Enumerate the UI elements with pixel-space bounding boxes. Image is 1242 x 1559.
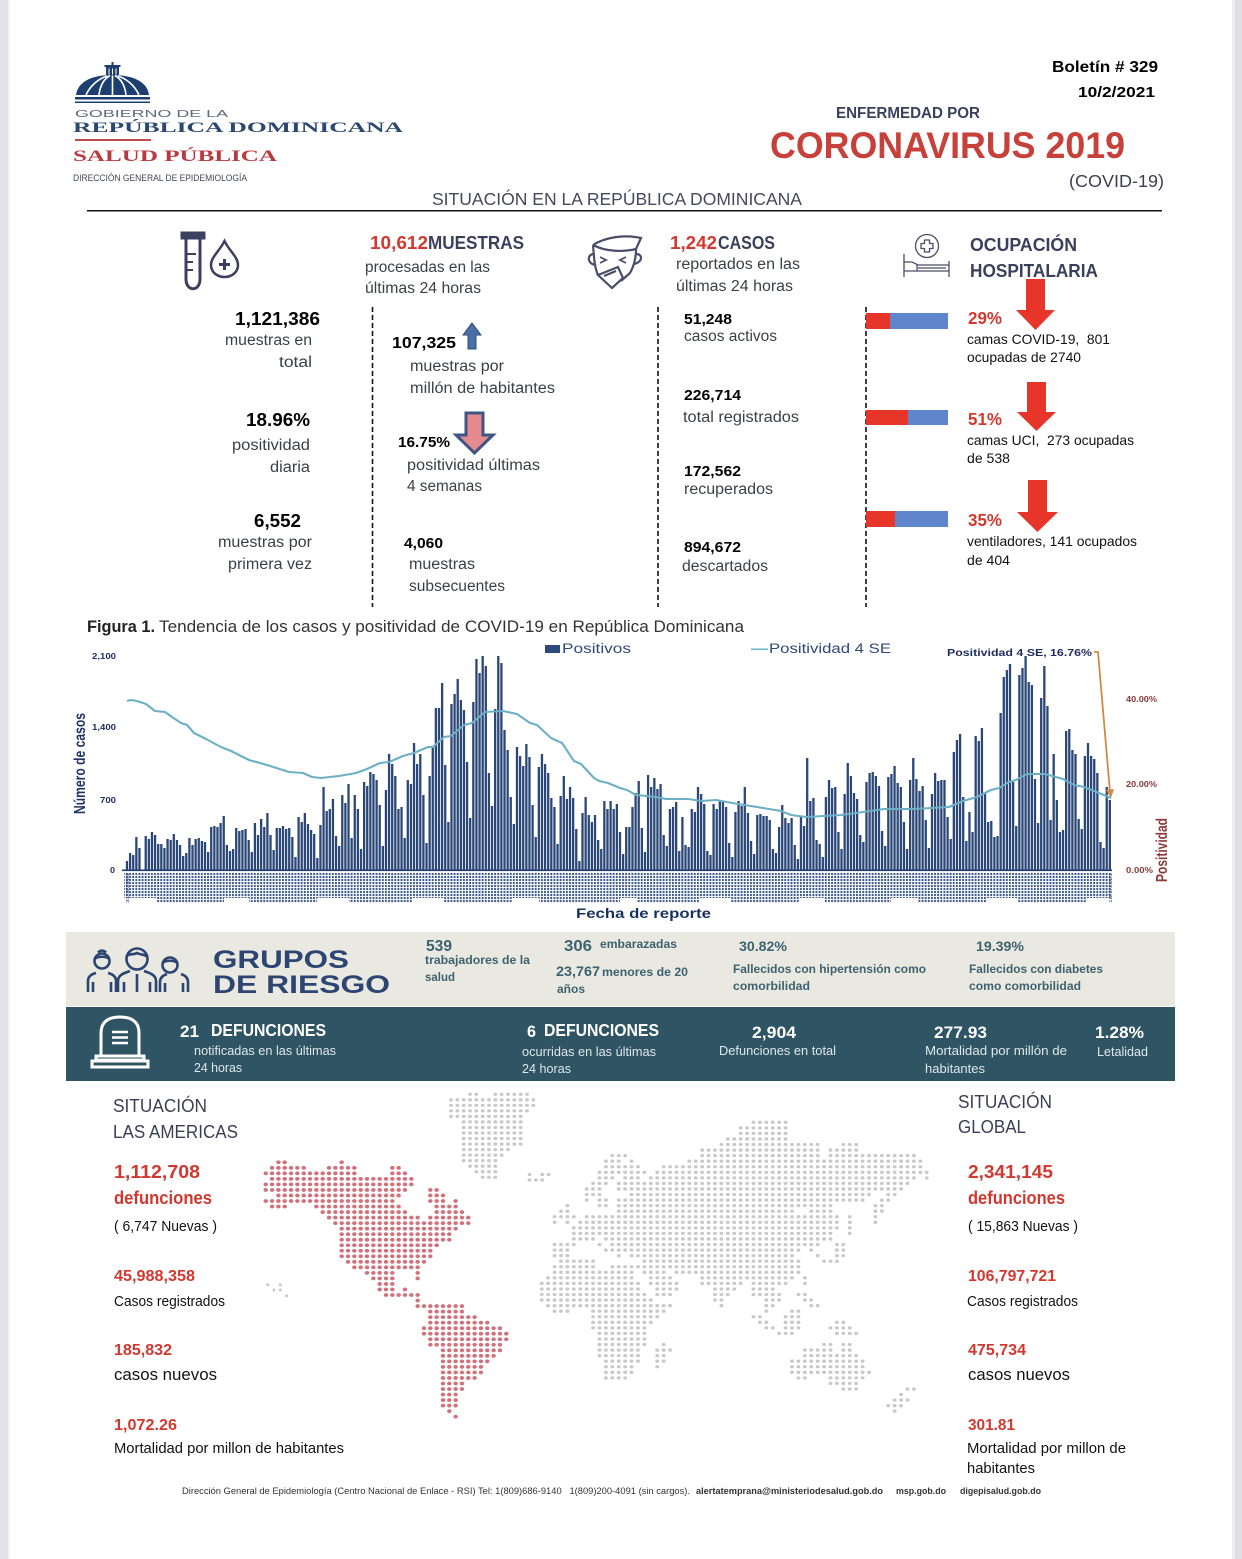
footer contact line: digepisalud.gob.do bbox=[960, 1486, 1041, 1496]
stat: positividad últimas 4 semanas: positividad últimas bbox=[407, 457, 540, 474]
stat: defunciones bbox=[114, 1161, 217, 1235]
heading: 1,242 casos: CASOS bbox=[718, 232, 775, 253]
stat: descartados: 894,672 bbox=[684, 540, 741, 556]
heading: 10,612 muestras: 10,612 bbox=[370, 232, 428, 253]
heading: 10,612 muestras bbox=[365, 232, 524, 297]
stat: casos nuevos bbox=[968, 1342, 1070, 1384]
stat: embarazadas: 306 bbox=[564, 938, 592, 955]
stat: mortalidad por millón bbox=[925, 1024, 1067, 1076]
bulletin number and date bbox=[1052, 59, 1158, 101]
bars: positivos por día bbox=[127, 656, 1110, 870]
figure caption: Figura 1. bbox=[87, 618, 155, 636]
stat: diabetes bbox=[969, 938, 1103, 993]
stat: casos nuevos: 185,832 bbox=[114, 1342, 172, 1359]
figure caption: Tendencia de los casos y positividad de COVID-19 en República Dominicana bbox=[159, 618, 745, 636]
footer contact line: alertatemprana@ministeriodesalud.gob.do bbox=[696, 1486, 884, 1496]
stat: mortalidad bbox=[967, 1417, 1126, 1477]
stat: muestras por millón: millón de habitantes bbox=[410, 380, 555, 397]
y axis left labels bbox=[92, 652, 117, 875]
stat: muestras subsecuentes: subsecuentes bbox=[409, 578, 505, 595]
arrow: up bbox=[463, 323, 481, 349]
heading: ocupación hospitalaria bbox=[970, 234, 1098, 281]
map: Groenlandia e Islandia bbox=[451, 1094, 549, 1180]
stat: embarazadas: embarazadas bbox=[600, 937, 677, 951]
map: Eurasia, África y Oceanía bbox=[542, 1122, 927, 1411]
panel: situación las Américas bbox=[113, 1095, 344, 1457]
stat: defunciones: 2,341,145 bbox=[968, 1161, 1053, 1182]
stat: positividad diaria: diaria bbox=[270, 459, 310, 476]
stat: muestras por primera vez: muestras por bbox=[218, 534, 312, 551]
stat: mortalidad: habitantes bbox=[967, 1461, 1035, 1477]
stat: positividad últimas 4 semanas: 16.75% bbox=[398, 435, 450, 451]
stat: casos registrados bbox=[114, 1268, 225, 1310]
stat: defunciones: 1,112,708 bbox=[114, 1161, 200, 1182]
panel: ocupación hospitalaria bbox=[866, 234, 1137, 568]
stat: muestras subsecuentes: muestras bbox=[409, 556, 475, 573]
world dot map bbox=[266, 1094, 927, 1417]
stat: defunciones: defunciones bbox=[968, 1188, 1065, 1208]
stat: positividad últimas 4 semanas bbox=[398, 435, 540, 495]
heading: situación las Américas: LAS AMERICAS bbox=[113, 1122, 238, 1142]
x axis date ticks: 10/2/2021 bbox=[1108, 872, 1113, 903]
y axis right labels: 40.00% bbox=[1126, 695, 1157, 704]
heading: situación global bbox=[958, 1091, 1052, 1137]
stat: muestras subsecuentes: 4,060 bbox=[404, 536, 443, 552]
stat: muestras por millón: muestras por bbox=[410, 358, 504, 375]
x axis title: Fecha de reporte bbox=[576, 906, 712, 921]
stat: diabetes: Fallecidos con diabetes bbox=[969, 962, 1103, 976]
logo: Gobierno de la República Dominicana, Salud Pública: SALUD PÚBLICA bbox=[73, 146, 278, 165]
icon: capitol dome bbox=[75, 62, 150, 103]
stat: casos nuevos bbox=[114, 1342, 217, 1384]
stat: casos registrados: Casos registrados bbox=[967, 1294, 1078, 1310]
stat: ventiladores: 35% bbox=[968, 510, 1002, 530]
heading: 10,612 muestras: MUESTRAS bbox=[428, 232, 524, 253]
heading: ocupación hospitalaria: HOSPITALARIA bbox=[970, 260, 1098, 281]
stat: camas COVID-19 bbox=[967, 308, 1110, 365]
stat: 21 defunciones notificadas bbox=[180, 1020, 336, 1075]
bar: camas COVID 29% bbox=[866, 313, 948, 329]
stat: mortalidad por millón: Mortalidad por millón de bbox=[925, 1044, 1067, 1058]
stat: defunciones: ( 6,747 Nuevas ) bbox=[114, 1219, 217, 1235]
y axis left title: Número de casos bbox=[72, 713, 89, 814]
stat: recuperados: recuperados bbox=[684, 481, 773, 498]
stat: recuperados: 172,562 bbox=[684, 464, 741, 480]
stat: mortalidad: 301.81 bbox=[968, 1417, 1015, 1434]
stat: muestras por primera vez bbox=[218, 510, 312, 573]
stat: defunciones en total: 2,904 bbox=[752, 1024, 797, 1042]
y axis left labels: 700 bbox=[100, 796, 117, 805]
stat: defunciones: ( 15,863 Nuevas ) bbox=[968, 1219, 1078, 1235]
legend bbox=[545, 641, 891, 656]
map: las Américas bbox=[266, 1162, 506, 1417]
heading: 10,612 muestras: últimas 24 horas bbox=[365, 280, 481, 297]
stat: casos nuevos: casos nuevos bbox=[114, 1366, 217, 1384]
stat: descartados: descartados bbox=[682, 558, 768, 575]
stat: muestras en total: total bbox=[279, 354, 312, 371]
stat: embarazadas bbox=[564, 937, 677, 955]
stat: muestras por millón: 107,325 bbox=[392, 335, 456, 352]
stat: defunciones en total: Defunciones en total bbox=[719, 1044, 836, 1058]
logo: Gobierno de la República Dominicana, Salud Pública bbox=[73, 62, 404, 184]
panel: muestras bbox=[182, 232, 555, 595]
stat: 6 defunciones ocurridas: ocurridas en las últimas bbox=[522, 1045, 656, 1059]
stat: mortalidad: Mortalidad por millon de habitantes bbox=[114, 1441, 344, 1457]
heading: grupos de riesgo: DE RIESGO bbox=[213, 971, 390, 999]
stat: camas UCI bbox=[967, 409, 1134, 466]
stat: ventiladores: ventiladores, 141 ocupados bbox=[967, 533, 1137, 549]
stat: camas UCI: 51% bbox=[968, 409, 1002, 429]
arrow: down bbox=[456, 413, 493, 453]
heading: 1,242 casos: 1,242 bbox=[670, 232, 717, 253]
x axis line bbox=[122, 870, 1112, 871]
stat: letalidad: Letalidad bbox=[1097, 1045, 1148, 1059]
stat: mortalidad por millón: 277.93 bbox=[934, 1024, 987, 1042]
stat: 6 defunciones ocurridas: DEFUNCIONES bbox=[544, 1020, 659, 1040]
stat: 21 defunciones notificadas: notificadas en las últimas bbox=[194, 1044, 336, 1058]
stat: mortalidad: 1,072.26 bbox=[114, 1417, 177, 1434]
stat: defunciones bbox=[968, 1161, 1078, 1235]
x axis date ticks bbox=[124, 872, 1113, 903]
stat: ventiladores: de 404 bbox=[967, 552, 1010, 568]
stat: muestras subsecuentes bbox=[404, 536, 505, 595]
heading: 1,242 casos: últimas 24 horas bbox=[676, 278, 793, 295]
icon: hospital bed bbox=[904, 234, 949, 277]
chart: casos positivos y positividad bbox=[72, 641, 1171, 921]
stat: casos registrados: 106,797,721 bbox=[968, 1268, 1056, 1285]
stat: hipertensión: 30.82% bbox=[739, 938, 788, 954]
stat: menores de 20 años: 23,767 bbox=[556, 963, 600, 979]
stat: casos nuevos: casos nuevos bbox=[968, 1366, 1070, 1384]
stat: positividad diaria: 18.96% bbox=[246, 409, 310, 430]
y axis right title: Positividad bbox=[1154, 818, 1171, 882]
stat: hipertensión bbox=[733, 938, 926, 993]
title: Enfermedad por Coronavirus 2019: (COVID-19) bbox=[1069, 171, 1164, 191]
callout: positividad 4 SE, 16.76%: Positividad 4 SE, 16.76% bbox=[947, 648, 1092, 659]
stat: mortalidad por millón: habitantes bbox=[925, 1062, 985, 1076]
stat: positividad diaria bbox=[232, 409, 310, 476]
callout: positividad 4 SE, 16.76% bbox=[947, 648, 1114, 798]
icon: test tube and drop bbox=[182, 233, 238, 289]
y axis right labels: 20.00% bbox=[1126, 780, 1157, 789]
heading: 1,242 casos: reportados en las bbox=[676, 256, 800, 273]
arrow: ventiladores down bbox=[1017, 480, 1058, 532]
stat: camas COVID-19: 29% bbox=[968, 308, 1002, 328]
panel: defunciones bbox=[66, 1007, 1175, 1081]
panel: grupos de riesgo bbox=[66, 932, 1175, 1006]
stat: menores de 20 años: años bbox=[557, 982, 585, 996]
footer contact line: msp.gob.do bbox=[896, 1486, 946, 1496]
legend: Positivos bbox=[562, 641, 631, 656]
footer contact line: Dirección General de Epidemiología (Centro Nacional de Enlace - RSI) Tel: 1(809)686-9140 1(809)200-4091 (sin cargos). bbox=[182, 1486, 690, 1496]
stat: casos activos: 51,248 bbox=[684, 312, 732, 328]
stat: muestras por millón bbox=[392, 335, 555, 397]
stat: casos activos: casos activos bbox=[684, 328, 777, 345]
line: positividad 4 SE bbox=[127, 700, 1111, 817]
stat: casos registrados: 45,988,358 bbox=[114, 1268, 195, 1285]
stat: camas UCI: camas UCI, 273 ocupadas bbox=[967, 432, 1134, 448]
stat: positividad últimas 4 semanas: 4 semanas bbox=[407, 478, 482, 495]
arrow: camas UCI down bbox=[1017, 382, 1056, 431]
stat: 21 defunciones notificadas: 24 horas bbox=[194, 1061, 242, 1075]
stat: casos nuevos: 475,734 bbox=[968, 1342, 1026, 1359]
stat: defunciones en total bbox=[719, 1024, 836, 1058]
stat: 6 defunciones ocurridas: 24 horas bbox=[522, 1062, 571, 1076]
logo: Gobierno de la República Dominicana, Salud Pública: GOBIERNO DE LA bbox=[75, 109, 229, 120]
stat: total registrados: total registrados bbox=[683, 409, 799, 426]
legend: Positividad 4 SE bbox=[769, 641, 891, 656]
bar: ventiladores 35% bbox=[866, 511, 948, 527]
section heading: situación en la República Dominicana: SITUACIÓN EN LA REPÚBLICA DOMINICANA bbox=[432, 188, 802, 209]
stat: trabajadores de la salud bbox=[425, 938, 530, 984]
stat: casos registrados: Casos registrados bbox=[114, 1294, 225, 1310]
stat: diabetes: 19.39% bbox=[976, 938, 1025, 954]
stat: muestras en total bbox=[225, 308, 320, 371]
heading: grupos de riesgo: GRUPOS bbox=[213, 946, 349, 974]
stat: casos activos bbox=[684, 312, 777, 345]
stat: diabetes: como comorbilidad bbox=[969, 979, 1081, 993]
y axis left labels: 2,100 bbox=[92, 652, 117, 661]
map: Hawái bbox=[268, 1285, 287, 1296]
stat: defunciones: defunciones bbox=[114, 1188, 212, 1208]
footer contact line bbox=[182, 1486, 1041, 1496]
stat: menores de 20 años: menores de 20 bbox=[602, 965, 688, 979]
stat: muestras en total: 1,121,386 bbox=[235, 308, 320, 329]
icon: tombstone bbox=[92, 1017, 148, 1067]
title: Enfermedad por Coronavirus 2019 bbox=[770, 105, 1164, 191]
y axis right labels: 0.00% bbox=[1126, 866, 1153, 875]
stat: mortalidad bbox=[114, 1417, 344, 1457]
y axis right labels bbox=[1126, 695, 1157, 875]
stat: menores de 20 años bbox=[556, 963, 688, 996]
stat: positividad diaria: positividad bbox=[232, 437, 310, 454]
heading: situación las Américas bbox=[113, 1095, 238, 1142]
heading: situación global: GLOBAL bbox=[958, 1117, 1026, 1137]
stat: camas COVID-19: camas COVID-19, 801 bbox=[967, 331, 1110, 347]
y axis left labels: 0 bbox=[110, 866, 116, 875]
stat: ventiladores bbox=[967, 510, 1137, 568]
stat: total registrados bbox=[683, 388, 799, 426]
stat: letalidad: 1.28% bbox=[1095, 1024, 1144, 1042]
icon: face with mask bbox=[589, 236, 641, 288]
title: Enfermedad por Coronavirus 2019: CORONAVIRUS 2019 bbox=[770, 125, 1125, 166]
logo: Gobierno de la República Dominicana, Salud Pública: REPÚBLICA DOMINICANA bbox=[73, 119, 404, 136]
stat: muestras en total: muestras en bbox=[225, 332, 312, 349]
title: Enfermedad por Coronavirus 2019: ENFERMEDAD POR bbox=[836, 105, 980, 122]
stat: trabajadores de la salud: 539 bbox=[426, 938, 452, 955]
stat: trabajadores de la salud: trabajadores de la bbox=[425, 953, 530, 967]
stat: muestras por primera vez: primera vez bbox=[228, 556, 312, 573]
icon: group of people bbox=[88, 948, 188, 992]
stat: 21 defunciones notificadas: 21 bbox=[180, 1022, 199, 1041]
arrow: camas COVID down bbox=[1016, 279, 1055, 330]
heading: 10,612 muestras: procesadas en las bbox=[365, 259, 490, 276]
stat: total registrados: 226,714 bbox=[684, 388, 741, 404]
stat: recuperados bbox=[684, 464, 773, 498]
stat: mortalidad: Mortalidad por millon de bbox=[967, 1441, 1126, 1457]
stat: letalidad bbox=[1095, 1024, 1148, 1059]
stat: muestras por primera vez: 6,552 bbox=[254, 510, 301, 531]
stat: hipertensión: comorbilidad bbox=[733, 979, 810, 993]
stat: casos registrados bbox=[967, 1268, 1078, 1310]
stat: camas COVID-19: ocupadas de 2740 bbox=[967, 349, 1081, 365]
stat: descartados bbox=[682, 540, 768, 575]
bulletin number and date: Boletín # 329 bbox=[1052, 59, 1158, 76]
bar: camas UCI 51% bbox=[866, 410, 948, 425]
stat: hipertensión: Fallecidos con hipertensión como bbox=[733, 962, 926, 976]
bulletin number and date: 10/2/2021 bbox=[1078, 85, 1155, 101]
panel: casos bbox=[589, 232, 800, 575]
x axis date ticks: 31/3/2020 bbox=[125, 872, 130, 903]
heading: ocupación hospitalaria: OCUPACIÓN bbox=[970, 234, 1077, 255]
stat: 21 defunciones notificadas: DEFUNCIONES bbox=[211, 1020, 326, 1040]
heading: situación global: SITUACIÓN bbox=[958, 1091, 1052, 1112]
stat: 6 defunciones ocurridas bbox=[522, 1020, 659, 1076]
logo: Gobierno de la República Dominicana, Salud Pública: DIRECCIÓN GENERAL DE EPIDEMIOLOGÍA bbox=[73, 173, 248, 184]
stat: 6 defunciones ocurridas: 6 bbox=[527, 1022, 536, 1041]
y axis left labels: 1,400 bbox=[92, 723, 117, 732]
heading: 1,242 casos bbox=[670, 232, 800, 295]
stat: camas UCI: de 538 bbox=[967, 450, 1010, 466]
stat: trabajadores de la salud: salud bbox=[425, 970, 455, 984]
heading: grupos de riesgo bbox=[213, 946, 390, 999]
panel: situación global bbox=[958, 1091, 1126, 1477]
heading: situación las Américas: SITUACIÓN bbox=[113, 1095, 207, 1116]
